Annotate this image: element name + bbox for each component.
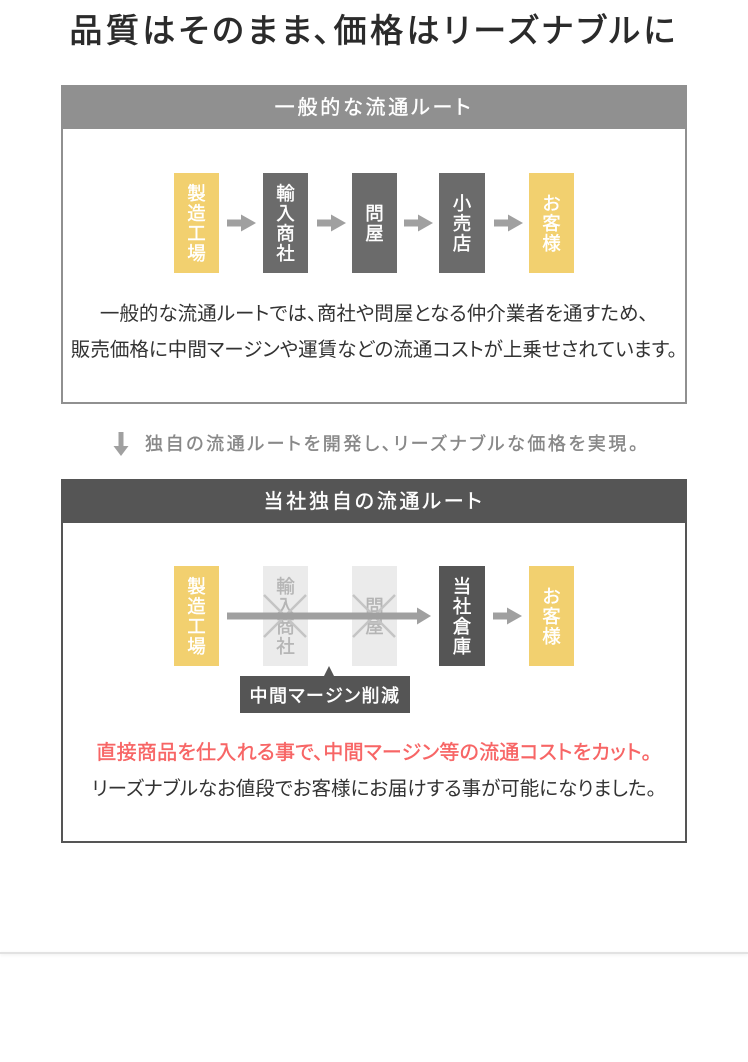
arrow: direct route [227,608,431,624]
flow: factory: 製 [187,576,206,596]
flow: importer [263,173,308,273]
flow: importer removed: 輸 [276,576,295,596]
flow: wholesaler [352,173,397,273]
arrow [404,214,433,232]
flow: importer: 入 [276,202,295,224]
flow: retailer: 小 [453,192,471,214]
panel: own distribution route [61,479,687,843]
panel: general distribution route [61,85,687,404]
heading: general route [61,85,687,129]
flow: importer removed [263,566,308,666]
flow: importer removed: 社 [276,636,295,656]
flow: factory: 工 [187,616,206,636]
flow: customer: 様 [542,232,561,254]
flow: factory [174,173,219,273]
text: general route description [71,303,677,361]
flow: retailer [439,173,485,273]
flow: factory: 製 [187,182,206,204]
flow: factory: 工 [187,222,206,244]
arrow [494,214,523,232]
icon: cross over wholesaler [352,594,396,638]
flow: wholesaler removed [352,566,397,666]
footer divider [0,952,748,954]
flow: wholesaler: 問 [365,202,384,224]
flow: wholesaler removed: 問 [365,596,384,616]
icon: cross over importer [263,594,307,638]
arrow [227,214,256,232]
flow: factory [174,566,219,666]
text: result message: リーズナブルなお値段でお客様にお届けする事が可能になりました。 [92,778,656,800]
flow: customer: お [542,586,561,606]
flow: customer: お [542,192,561,214]
arrow [317,214,346,232]
flow: customer: 様 [542,626,561,646]
arrow [493,608,522,624]
flow: factory: 造 [187,202,206,224]
flow: retailer: 店 [453,232,471,254]
heading: own route [61,479,687,523]
flow: retailer: 売 [453,212,471,234]
text: general route description: 一般的な流通ルートでは、商社や問屋となる仲介業者を通すため、 [100,303,648,325]
flow: importer: 社 [276,242,295,264]
flow: importer: 商 [276,222,295,244]
flow: own warehouse [439,566,485,666]
flow: importer removed: 商 [276,616,295,636]
callout: margin reduction: 中間マージン削減 [249,686,401,706]
flow: customer [529,566,574,666]
flow: own warehouse: 社 [453,596,471,616]
flow: importer removed: 入 [276,596,295,616]
flow: wholesaler removed: 屋 [365,616,384,636]
flow: factory: 造 [187,596,206,616]
text: highlighted message: 直接商品を仕入れる事で、中間マージン等の流通コストをカット。 [96,742,652,764]
heading: own route: 当社独自の流通ルート [263,491,485,513]
flow: customer: 客 [542,606,561,626]
heading: general route: 一般的な流通ルート [275,97,473,119]
flow: factory: 場 [187,636,206,656]
flow: own warehouse: 庫 [453,636,471,656]
flow: own warehouse: 当 [453,576,471,596]
flow: customer: 客 [542,212,561,234]
title: 品質はそのまま、価格はリーズナブルに [69,12,679,49]
flow: own warehouse: 倉 [453,616,471,636]
flow: factory: 場 [187,242,206,264]
callout: margin reduction [240,666,410,713]
text: transition message: 独自の流通ルートを開発し、リーズナブルな価格を実現。 [145,434,641,454]
icon: down arrow [114,432,128,456]
flow: customer [529,173,574,273]
flow: wholesaler: 屋 [365,222,384,244]
flow: importer: 輸 [276,182,295,204]
text: general route description: 販売価格に中間マージンや運賃などの流通コストが上乗せされています。 [71,339,677,361]
